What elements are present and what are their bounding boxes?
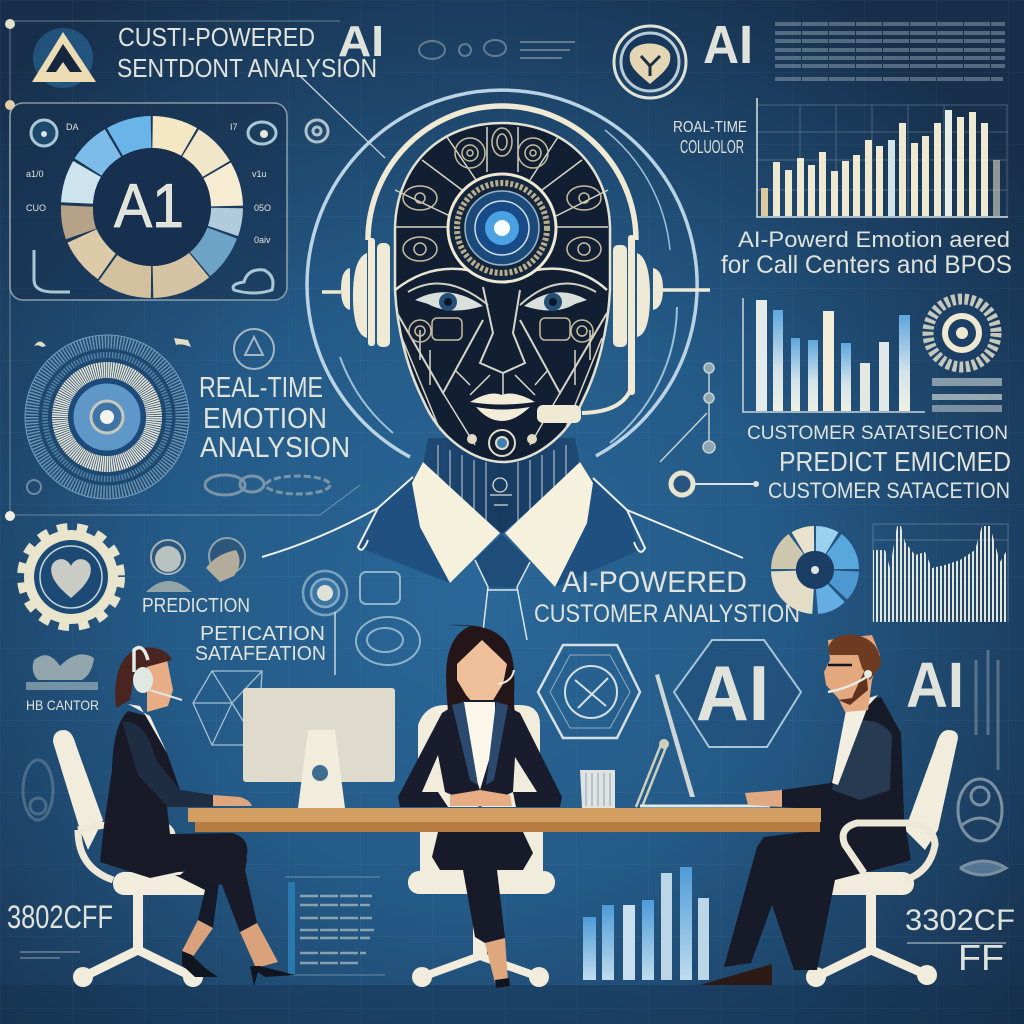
figure: AI head with headset bbox=[262, 76, 743, 640]
microphone bbox=[537, 385, 632, 423]
chair: left bbox=[53, 730, 215, 987]
text lines top right bbox=[775, 24, 1005, 79]
desk bbox=[188, 808, 821, 832]
person: left agent bbox=[100, 648, 295, 986]
icons around target bbox=[34, 338, 191, 347]
panel small labels: I7 bbox=[230, 122, 238, 132]
text code left: 3802CFF bbox=[7, 899, 113, 935]
icons: helmet and eye right bbox=[958, 779, 1006, 875]
chair: right bbox=[797, 730, 958, 987]
faint icon left bbox=[23, 760, 53, 820]
person: right agent bbox=[700, 635, 911, 985]
icon: hexagon tools bbox=[538, 645, 640, 738]
panel: real-time target bbox=[25, 329, 350, 499]
label: real-time colour: ROAL-TIME bbox=[673, 119, 747, 136]
heading: AI-powered customer analysis: AI-POWERED bbox=[562, 566, 747, 599]
heading: AI-powered customer analysis bbox=[534, 566, 800, 628]
panel small labels: v1u bbox=[252, 169, 267, 179]
panel: AI donut bbox=[10, 103, 287, 300]
heading: AI-powered emotion: AI-Powerd Emotion aered bbox=[738, 227, 1010, 252]
table lines under desk bbox=[285, 877, 385, 975]
eyes bbox=[408, 284, 596, 311]
area chart right bbox=[873, 524, 1008, 622]
label: AI top right: AI bbox=[703, 15, 753, 75]
panel small labels bbox=[26, 122, 271, 245]
icons: two faces bbox=[146, 538, 245, 592]
icon: gear heart bbox=[23, 529, 119, 625]
label: real-time colour bbox=[673, 119, 747, 157]
bar chart right middle bbox=[743, 298, 925, 412]
heading: real-time emotion analysis: EMOTION bbox=[203, 403, 327, 435]
headset earcups bbox=[322, 235, 710, 395]
heading: sentiment analysis bbox=[117, 22, 377, 83]
heading: AI-powered emotion bbox=[721, 227, 1012, 279]
text code right: 3302CF bbox=[905, 904, 1015, 937]
heading: real-time emotion analysis: REAL-TIME bbox=[199, 372, 323, 404]
text code left bbox=[7, 899, 113, 958]
heading: AI-powered customer analysis: CUSTOMER ANALYSTION bbox=[534, 600, 800, 628]
label: satisfaction: SATAFEATION bbox=[195, 643, 326, 665]
heading: customer satisfaction: CUSTOMER SATATSIECTION bbox=[747, 423, 1008, 444]
icon: laptop right bbox=[636, 674, 770, 807]
label: satisfaction bbox=[195, 623, 326, 665]
pencil cup bbox=[580, 770, 615, 808]
halo rings bbox=[300, 76, 697, 457]
icon: ornate gear bbox=[928, 299, 996, 367]
third eye bbox=[448, 174, 556, 282]
badge: AI hexagon bbox=[674, 640, 801, 747]
panel small labels: 0aiv bbox=[254, 235, 271, 245]
heading: sentiment analysis: CUSTI-POWERED bbox=[118, 22, 315, 52]
panel small labels: CUO bbox=[26, 203, 46, 213]
decorative glyph strip top bbox=[419, 40, 575, 59]
panel small labels: DA bbox=[66, 122, 79, 132]
panel small labels: a1/0 bbox=[26, 169, 44, 179]
heading: customer satisfaction bbox=[747, 423, 1011, 503]
heading: real-time emotion analysis: ANALYSION bbox=[200, 432, 350, 464]
badge: AI hexagon: AI bbox=[696, 649, 769, 737]
icon: hexagon wireframe bbox=[193, 671, 262, 745]
donut label: A1 bbox=[114, 172, 184, 241]
collar bbox=[412, 462, 593, 587]
head bbox=[395, 123, 610, 462]
heading: real-time emotion analysis bbox=[199, 372, 350, 464]
monitor bbox=[243, 688, 395, 808]
label: hb control: HB CANTOR bbox=[26, 697, 99, 713]
donut chart right bbox=[784, 538, 846, 602]
arrow: connector bbox=[671, 473, 759, 495]
lips bbox=[470, 394, 535, 421]
circuit lines on face bbox=[395, 127, 608, 445]
neck bbox=[423, 438, 580, 534]
bar chart top right bbox=[757, 98, 1008, 217]
heading: AI-powered emotion: for Call Centers and BPOS bbox=[721, 251, 1012, 279]
heading: sentiment analysis: SENTDONT ANALYSION bbox=[117, 53, 377, 83]
icon: heart circle bbox=[614, 26, 686, 98]
small icon right of panel bbox=[306, 120, 328, 142]
text code right bbox=[905, 904, 1015, 978]
label: AI top left: AI bbox=[338, 17, 384, 66]
person: center agent bbox=[398, 625, 562, 988]
text lines right middle bbox=[932, 378, 1002, 412]
donut chart bbox=[77, 132, 227, 282]
panel icons bbox=[31, 120, 276, 293]
chair: center bbox=[408, 705, 555, 987]
label: real-time colour: COLUOLOR bbox=[680, 137, 744, 157]
concentric target bbox=[25, 335, 189, 499]
jacket bbox=[358, 477, 640, 587]
icon: warning triangle bbox=[32, 28, 96, 88]
label: prediction: PREDICTION bbox=[142, 595, 250, 617]
label: satisfaction: PETICATION bbox=[200, 623, 325, 645]
label: AI right: AI bbox=[906, 649, 964, 721]
chair armrest right bbox=[843, 823, 935, 880]
tie knot bbox=[475, 535, 530, 587]
panel small labels: 05O bbox=[254, 203, 271, 213]
icons cluster center left bbox=[303, 571, 420, 675]
chin medallion bbox=[468, 430, 536, 456]
bar chart bottom bbox=[583, 867, 709, 980]
side text vertical bbox=[976, 650, 998, 770]
text code right: FF bbox=[958, 937, 1004, 978]
label: hb control bbox=[26, 654, 99, 713]
connector dots bbox=[660, 363, 715, 462]
